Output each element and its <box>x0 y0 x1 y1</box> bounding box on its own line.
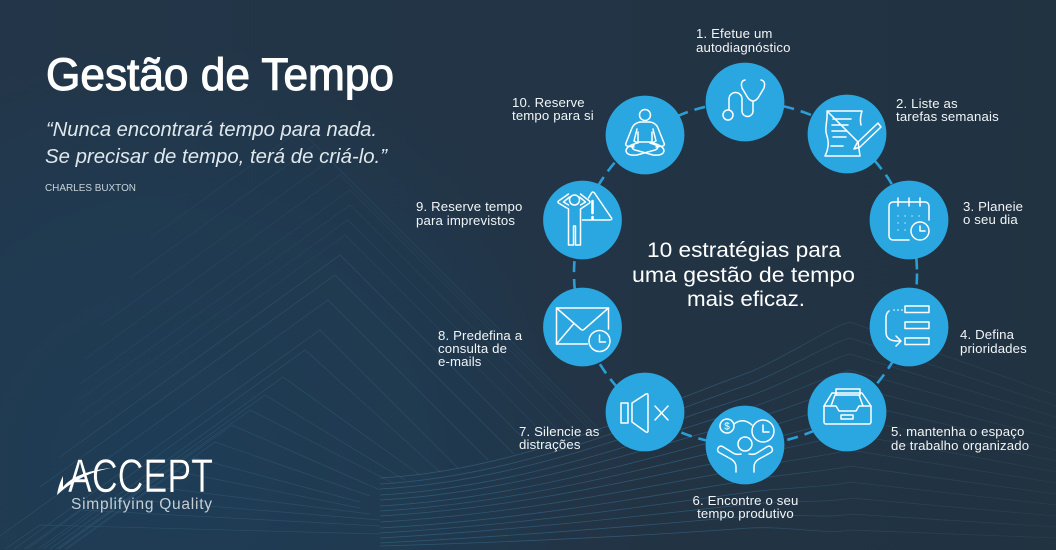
step 1: autodiagnostic: autodiagnóstico <box>696 40 791 55</box>
logo: Accept <box>57 449 213 513</box>
quote: Se precisar de tempo, terá de criá-lo.” <box>45 146 388 168</box>
step 8: email schedule: consulta de <box>438 341 507 356</box>
step 1: autodiagnostic <box>696 26 791 141</box>
step 6: productive time: 6. Encontre o seu <box>693 493 798 508</box>
step 7: silence distractions: 7. Silencie as <box>519 424 600 439</box>
central statement: mais eficaz. <box>687 287 805 311</box>
step 5: organised workspace: 5. mantenha o espaço <box>891 424 1025 439</box>
step 8: email schedule <box>438 288 622 369</box>
step 6: productive time <box>693 406 798 521</box>
step 6: productive time: tempo produtivo <box>697 506 794 521</box>
step 7: silence distractions <box>519 373 684 452</box>
step 2: weekly tasks: tarefas semanais <box>896 109 999 124</box>
step 10: time for yourself <box>512 95 684 174</box>
step 1: autodiagnostic: 1. Efetue um <box>696 26 773 41</box>
step 7: silence distractions: distrações <box>519 437 581 452</box>
quote <box>45 119 388 168</box>
step 9: unexpected events: 9. Reserve tempo <box>416 199 522 214</box>
step 9: unexpected events <box>416 181 622 259</box>
step 9: unexpected events: para imprevistos <box>416 213 515 228</box>
step 2: weekly tasks: 2. Liste as <box>896 96 958 111</box>
step 5: organised workspace: de trabalho organizado <box>891 438 1029 453</box>
step 4: priorities: prioridades <box>960 341 1027 356</box>
dashed ring connector <box>574 102 917 445</box>
step 8: email schedule: 8. Predefina a <box>438 328 523 343</box>
title: Gestão de Tempo <box>46 49 394 100</box>
central statement: uma gestão de tempo <box>632 263 855 287</box>
logo: Accept: Simplifying Quality <box>71 496 212 513</box>
step 10: time for yourself: 10. Reserve <box>512 95 585 110</box>
step 4: priorities <box>870 288 1027 366</box>
step 8: email schedule: e-mails <box>438 354 482 369</box>
step 2: weekly tasks <box>808 95 999 173</box>
step 6: productive time: $ <box>724 422 730 432</box>
logo: Accept: ACCEPT <box>68 449 213 502</box>
step 10: time for yourself: tempo para si <box>512 108 594 123</box>
central statement <box>632 238 855 311</box>
step 3: plan your day <box>870 181 1023 259</box>
quote: “Nunca encontrará tempo para nada. <box>46 119 377 141</box>
step 3: plan your day: o seu dia <box>963 212 1018 227</box>
step 5: organised workspace <box>808 373 1029 453</box>
step 3: plan your day: 3. Planeie <box>963 199 1023 214</box>
step 4: priorities: 4. Defina <box>960 327 1015 342</box>
quote author: CHARLES BUXTON <box>45 183 136 194</box>
central statement: 10 estratégias para <box>647 238 841 262</box>
